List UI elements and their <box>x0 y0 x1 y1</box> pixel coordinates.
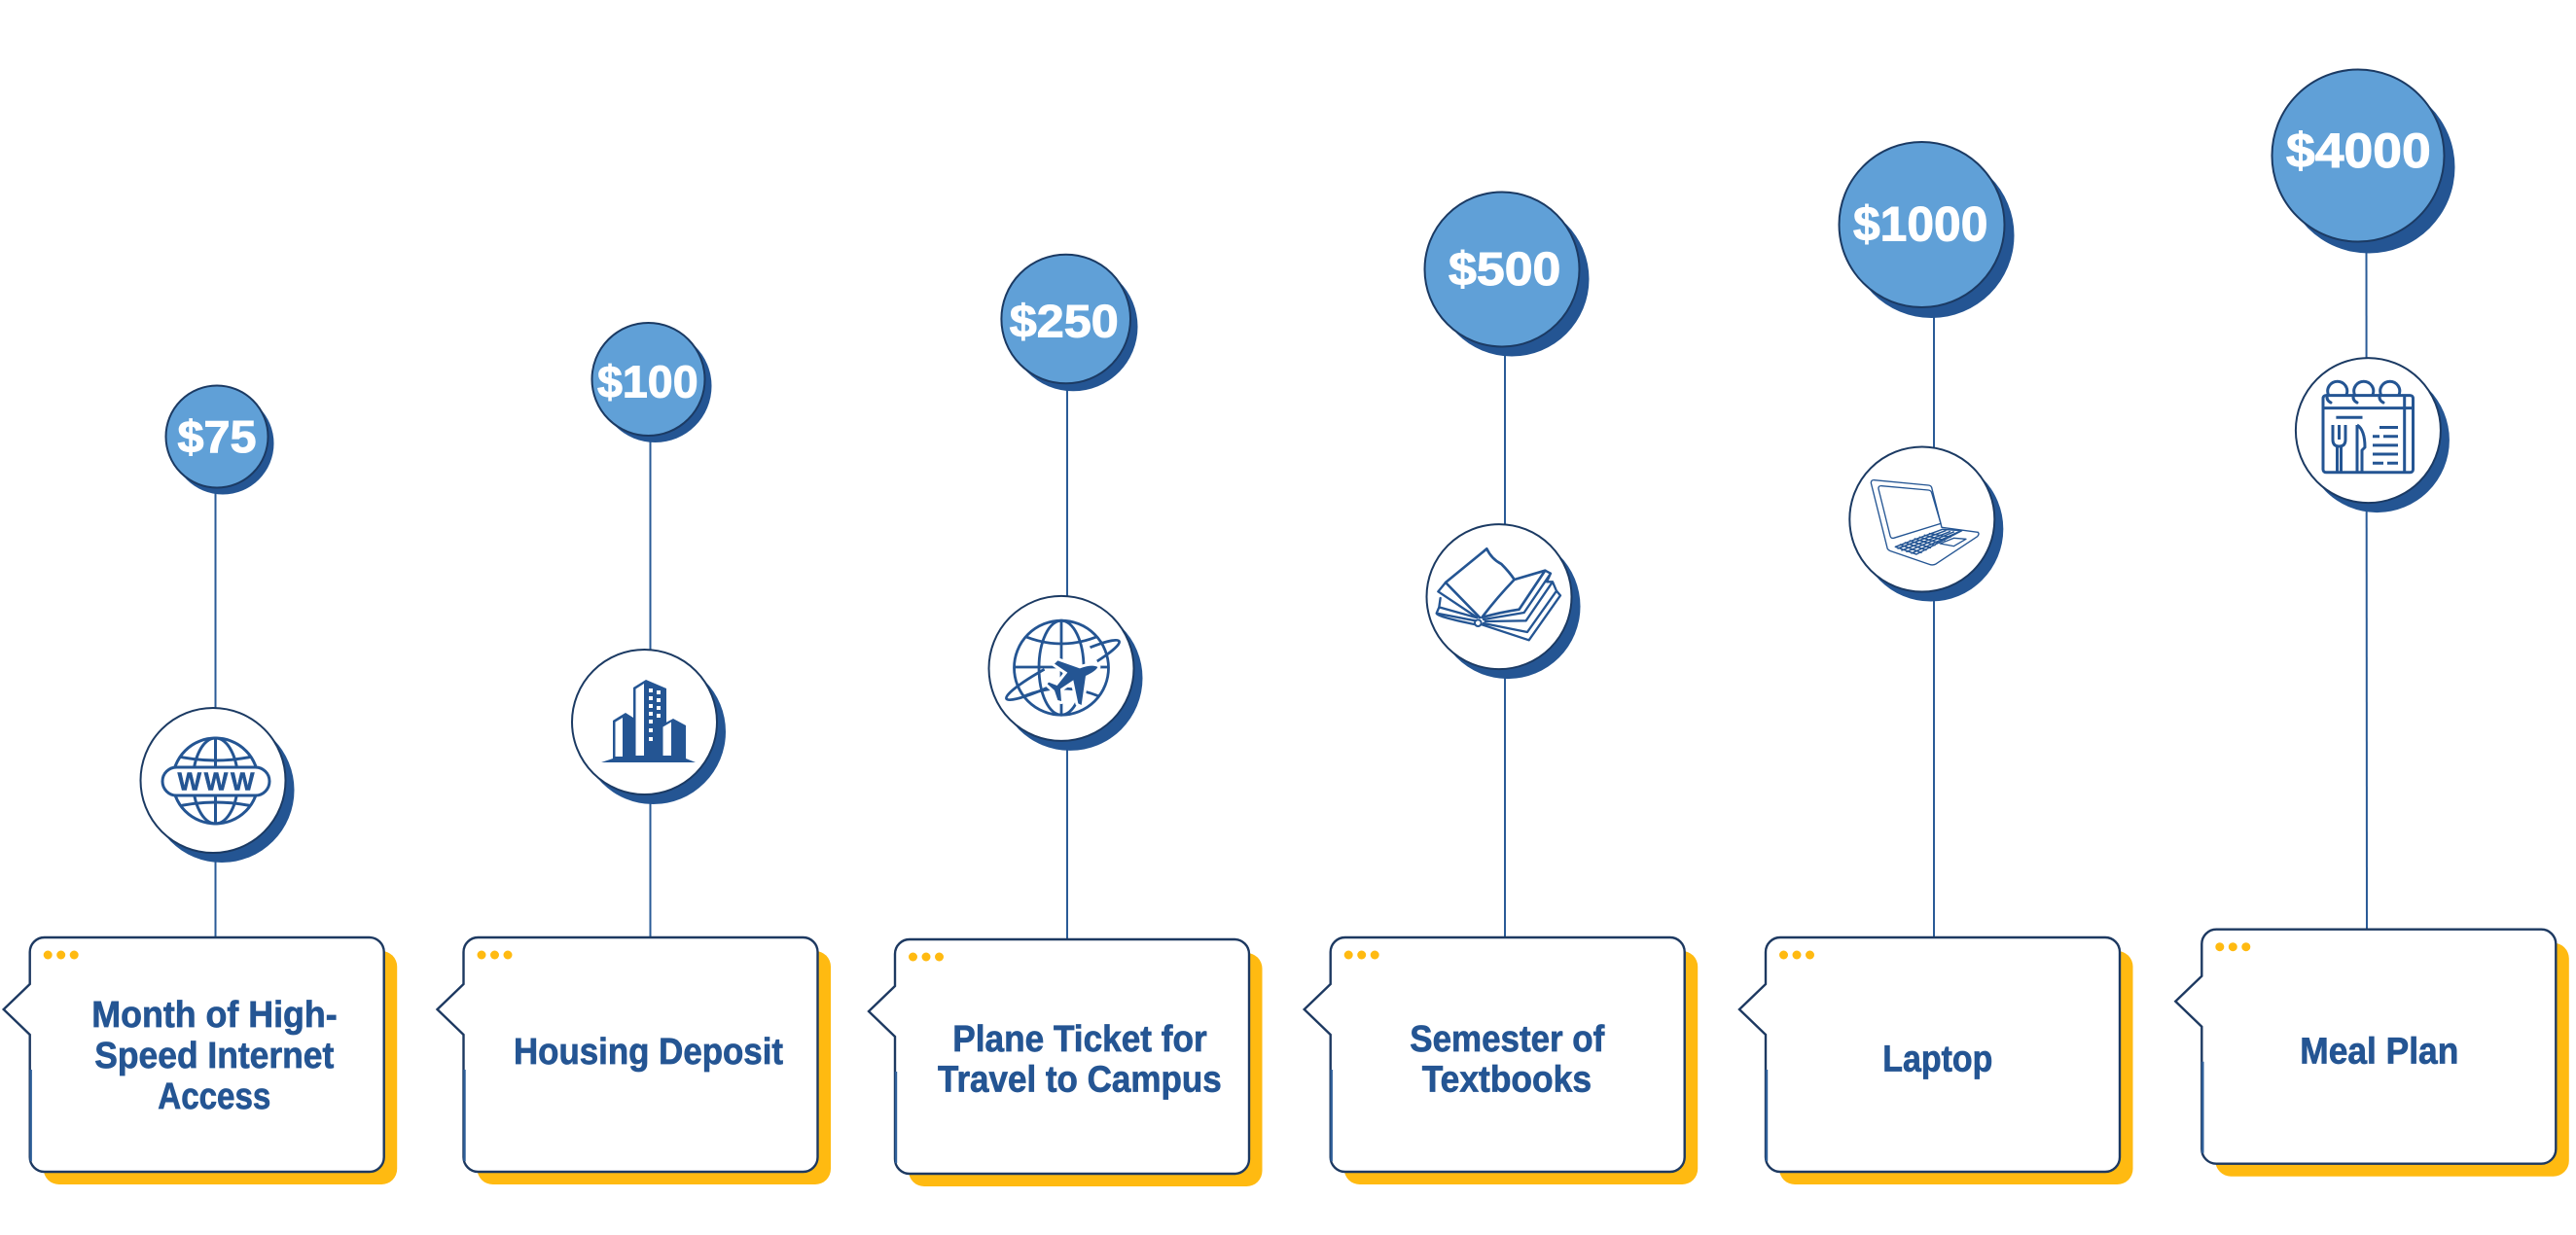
icon: globe with plane <box>988 596 1142 751</box>
label card: month of high-speed internet access: Speed Internet <box>94 1036 335 1076</box>
price bubble: $100: $100 <box>597 356 698 406</box>
label card: meal plan: Meal Plan <box>2300 1031 2458 1072</box>
price bubble: $75: $75 <box>177 411 257 462</box>
column: plane ticket, $250 <box>869 255 1263 1186</box>
connector line <box>1504 345 1506 938</box>
column: laptop, $1000 <box>1739 142 2132 1184</box>
price bubble: $4000 <box>2272 70 2455 253</box>
connector line <box>1933 311 1935 938</box>
price bubble: $1000 <box>1839 142 2014 318</box>
icon: www globe <box>140 708 294 863</box>
icon: menu notebook <box>2296 358 2450 512</box>
icon: www globe: WWW <box>177 766 255 795</box>
connector line <box>1066 379 1068 940</box>
connector line <box>650 433 652 938</box>
column: housing deposit, $100 <box>438 323 831 1184</box>
connector line <box>2366 248 2368 931</box>
label card: housing deposit: Housing Deposit <box>514 1032 783 1073</box>
label card: plane ticket for travel to campus: Travel to Campus <box>938 1060 1222 1101</box>
column: meal plan, $4000 <box>2175 70 2569 1177</box>
column: semester of textbooks, $500 <box>1305 193 1698 1184</box>
price bubble: $250: $250 <box>1010 296 1119 346</box>
column: month of high-speed internet access, $75 <box>4 385 397 1184</box>
label card: month of high-speed internet access <box>4 937 397 1184</box>
price bubble: $250 <box>1001 255 1137 391</box>
price bubble: $500: $500 <box>1449 244 1560 296</box>
label card: month of high-speed internet access: Month of High- <box>91 995 338 1036</box>
label card: plane ticket for travel to campus <box>869 939 1263 1186</box>
label card: meal plan <box>2175 930 2569 1177</box>
label card: month of high-speed internet access: Access <box>158 1076 270 1117</box>
price bubble: $500 <box>1424 193 1590 356</box>
label card: semester of textbooks: Textbooks <box>1422 1060 1592 1101</box>
price bubble: $4000: $4000 <box>2286 124 2431 178</box>
icon: laptop <box>1849 447 2003 601</box>
label card: laptop <box>1739 937 2132 1184</box>
label card: housing deposit <box>438 937 831 1184</box>
price bubble: $75 <box>165 385 274 494</box>
label card: laptop: Laptop <box>1882 1040 1992 1080</box>
icon: buildings <box>572 650 726 804</box>
icon: open book <box>1426 524 1580 679</box>
price bubble: $100 <box>591 323 712 442</box>
price bubble: $1000: $1000 <box>1853 196 1987 251</box>
label card: semester of textbooks <box>1305 937 1698 1184</box>
label card: semester of textbooks: Semester of <box>1410 1019 1605 1060</box>
label card: plane ticket for travel to campus: Plane Ticket for <box>952 1019 1207 1060</box>
connector line <box>214 486 216 938</box>
